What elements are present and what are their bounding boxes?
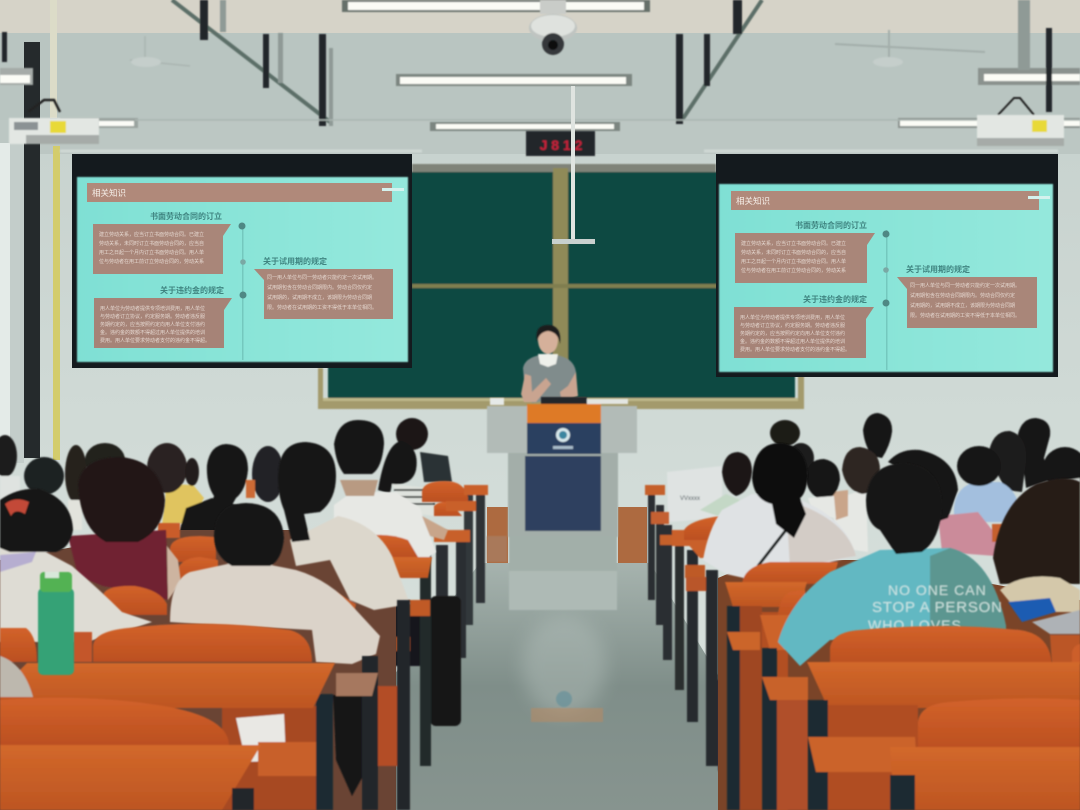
podium emblem panel	[527, 423, 601, 454]
right foreground student in teal shirt	[760, 463, 1006, 810]
shirt lettering: NO ONE CAN	[888, 582, 987, 598]
slide box: penalty: 用人单位为劳动者提供专项培训费用，用人单位	[740, 314, 845, 321]
slide box: written contract: 劳动关系，未同时订立书面劳动合同的，应当自	[741, 249, 846, 256]
right projection screen	[716, 154, 1058, 377]
bag on far right desk and boxes near the wall: VVxxxx	[680, 496, 700, 502]
slide box: penalty	[94, 298, 232, 348]
slide box: written contract: 位与劳动者在用工前订立劳动合同的，劳动关系	[741, 267, 846, 274]
security camera on ceiling	[529, 0, 577, 55]
slide heading: written contract: 书面劳动合同的订立	[795, 220, 867, 230]
under-desk area, row 2	[222, 600, 410, 810]
slide box: written contract: 建立劳动关系，应当订立书面劳动合同。已建立	[99, 231, 204, 238]
projector pole and tray	[552, 86, 595, 244]
slide box: probation: 同一用人单位与同一劳动者只能约定一次试用期。	[267, 274, 377, 281]
bag on far right desk and boxes near the wall	[487, 466, 722, 562]
slide box: probation: 同一用人单位与同一劳动者只能约定一次试用期。	[910, 282, 1020, 289]
slide box: probation: 试用期的，试用期不成立，该期限为劳动合同期	[267, 294, 372, 301]
student with hair clip in white top	[0, 489, 152, 642]
slide heading: written contract: 书面劳动合同的订立	[150, 211, 222, 221]
slide title bar	[731, 191, 1039, 210]
green water bottle	[38, 572, 74, 675]
slide heading: probation: 关于试用期的规定	[906, 264, 970, 274]
slide box: penalty: 金。违约金的数额不得超过用人单位提供的培训	[740, 338, 845, 345]
slide box: probation: 限。劳动者在试用期的工资不得低于本单位相同。	[910, 312, 1020, 319]
slide title bar: 相关知识	[736, 196, 770, 206]
slide title bar: 相关知识	[92, 188, 126, 198]
far right student	[993, 478, 1080, 664]
left front chairs and desks	[0, 600, 410, 810]
right rear poles, seats and desks	[645, 485, 760, 810]
slide box: penalty: 费用。用人单位要求劳动者支付的违约金不得超。	[740, 346, 850, 353]
slide box: probation	[254, 269, 393, 319]
LED clock display	[526, 131, 595, 156]
ceiling lights, trusses and fans	[0, 0, 1080, 151]
slide box: written contract: 用工之日起一个月内订立书面劳动合同。用人单	[741, 258, 846, 265]
slide box: penalty	[734, 307, 874, 358]
desk row 2 left	[0, 663, 335, 708]
slide box: written contract: 建立劳动关系，应当订立书面劳动合同。已建立	[741, 240, 846, 247]
slide box: written contract: 位与劳动者在用工前订立劳动合同的，劳动关系	[99, 258, 204, 265]
slide box: probation: 限。劳动者在试用期的工资不得低于本单位相同。	[267, 304, 377, 311]
slide heading: penalty: 关于违约金的规定	[803, 294, 867, 304]
front desk left	[0, 745, 261, 810]
slide box: written contract	[735, 233, 875, 283]
podium door	[525, 456, 601, 531]
right foreground chairs and desks	[807, 626, 1080, 810]
slide box: probation: 试用期包含在劳动合同期限内。劳动合同仅约定	[910, 292, 1015, 299]
slide box: penalty: 与劳动者订立协议，约定服务期。劳动者违反服	[740, 322, 845, 329]
student in white shirt with short hair	[334, 420, 448, 578]
shadowed base under left seating	[0, 530, 396, 810]
podium orange top	[527, 404, 601, 423]
right back students	[700, 413, 1080, 556]
slide box: penalty: 金。违约金的数额不得超过用人单位提供的培训	[100, 329, 205, 336]
lecturer	[521, 325, 578, 403]
slide heading: penalty: 关于违约金的规定	[160, 285, 224, 295]
slide timeline	[882, 230, 890, 370]
slide box: written contract: 用工之日起一个月内订立书面劳动合同。用人单	[99, 249, 204, 256]
front chair back left	[0, 698, 229, 745]
slide box: probation: 试用期包含在劳动合同期限内。劳动合同仅约定	[267, 284, 372, 291]
blackboard	[318, 164, 804, 409]
slide box: penalty: 务期约定的，应当按照约定向用人单位支付违约	[740, 330, 845, 337]
left projection screen	[72, 154, 412, 368]
shadowed base under right seating	[718, 560, 1080, 810]
slide box: penalty: 与劳动者订立协议，约定服务期。劳动者违反服	[100, 313, 205, 320]
slide box: penalty: 务期约定的，应当按照约定向用人单位支付违约	[100, 321, 205, 328]
slide heading: probation: 关于试用期的规定	[263, 256, 327, 266]
slide timeline	[238, 222, 246, 360]
slide box: written contract: 劳动关系，未同时订立书面劳动合同的，应当自	[99, 240, 204, 247]
left projector	[9, 100, 99, 144]
shirt lettering: STOP A PERSON	[872, 599, 1003, 616]
right middle student with ponytail	[703, 443, 856, 810]
slide box: penalty: 用人单位为劳动者提供专项培训费用，用人单位	[100, 305, 205, 312]
left back rows of students	[0, 418, 452, 536]
right projector	[977, 98, 1064, 146]
student in beige top, foreground left	[170, 503, 380, 664]
slide box: probation	[897, 277, 1037, 328]
left rear desks	[376, 481, 488, 766]
student in red dress	[68, 457, 181, 615]
slide box: probation: 试用期的，试用期不成立，该期限为劳动合同期	[910, 302, 1015, 309]
shirt lettering: WHO LOVES	[868, 617, 962, 633]
slide title bar	[87, 183, 392, 202]
chairs behind the middle students, left	[158, 523, 218, 580]
slide box: written contract	[93, 224, 231, 274]
slide box: penalty: 费用。用人单位要求劳动者支付的违约金不得超。	[100, 337, 210, 344]
podium	[487, 397, 637, 610]
student with ponytail	[278, 442, 410, 622]
LED clock display: J 8 1 2	[540, 137, 583, 153]
